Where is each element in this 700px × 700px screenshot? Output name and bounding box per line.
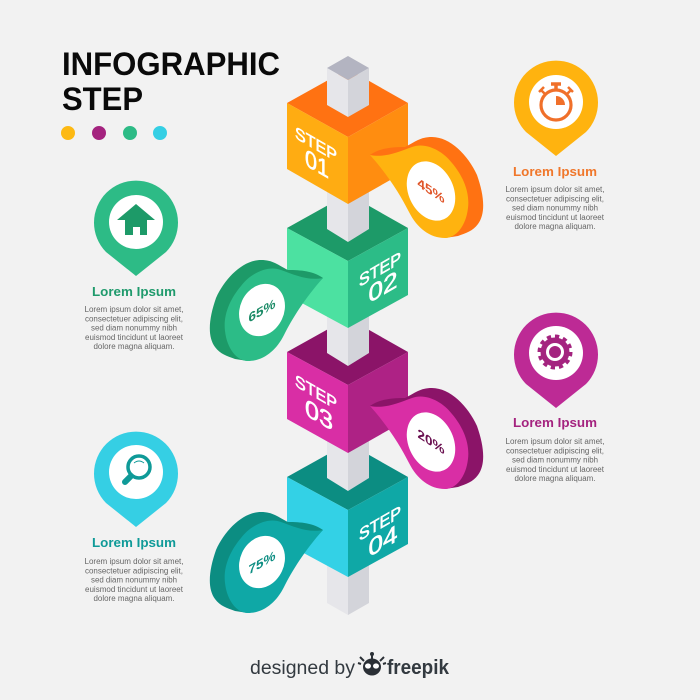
- callout: 20%: 20%: [418, 426, 445, 459]
- text block: left lower: Lorem Ipsum: [92, 535, 176, 550]
- cube: step 02: 02: [368, 266, 398, 309]
- text block: left lower: sed diam nonummy nibh: [91, 576, 177, 585]
- text block: left upper: Lorem ipsum dolor sit amet,: [84, 305, 184, 314]
- pillar: segment between steps 03 and 04: [327, 430, 369, 491]
- cube: step 01: STEP: [295, 122, 337, 166]
- title: STEP: [62, 81, 143, 117]
- cube: step 01: [287, 69, 408, 204]
- icon: magnifier: [125, 456, 150, 482]
- pillar: segment between steps 01 and 02: [327, 180, 369, 242]
- pin: stopwatch: [514, 61, 598, 156]
- pin: gear: [514, 313, 598, 408]
- text block: left upper: [84, 284, 184, 351]
- callout: 75%: [210, 512, 323, 613]
- cube: step 04: 04: [368, 520, 398, 563]
- text block: left upper: consectetuer adipiscing elit,: [85, 314, 183, 323]
- cube: step 03: [287, 318, 408, 453]
- text block: left upper: dolore magna aliquam.: [94, 342, 174, 351]
- text block: right lower: consectetuer adipiscing elit,: [506, 446, 604, 455]
- icon: freepik mascot: [358, 652, 386, 676]
- callout: 20%: [370, 388, 483, 489]
- icon: house: [117, 204, 155, 235]
- text block: left lower: dolore magna aliquam.: [94, 594, 174, 603]
- callout: 65%: 65%: [248, 295, 276, 326]
- text block: right lower: Lorem Ipsum: [513, 415, 597, 430]
- cube: step 02: STEP: [359, 247, 401, 291]
- text block: top right: Lorem Ipsum: [513, 164, 597, 179]
- callout: 65%: [210, 260, 323, 361]
- footer credit: [250, 652, 450, 679]
- pillar: top segment: [327, 56, 369, 117]
- footer credit: freepik: [387, 657, 450, 679]
- text block: top right: sed diam nonummy nibh: [512, 204, 598, 213]
- text block: left lower: consectetuer adipiscing elit,: [85, 566, 183, 575]
- text block: left upper: euismod tincidunt ut laoreet: [85, 333, 184, 342]
- text block: left upper: sed diam nonummy nibh: [91, 324, 177, 333]
- pillar: segment between steps 02 and 03: [327, 305, 369, 366]
- text block: right lower: sed diam nonummy nibh: [512, 456, 598, 465]
- cube: step 04: [287, 443, 408, 577]
- title: [62, 46, 280, 117]
- text block: right lower: Lorem ipsum dolor sit amet,: [506, 437, 604, 446]
- text block: right lower: euismod tincidunt ut laoreet: [506, 465, 605, 474]
- colour dots: [61, 126, 167, 140]
- text block: left lower: euismod tincidunt ut laoreet: [85, 585, 184, 594]
- icon: gear: [540, 336, 570, 368]
- icon: stopwatch: [539, 84, 573, 120]
- text block: left upper: Lorem Ipsum: [92, 284, 176, 299]
- text block: left lower: Lorem ipsum dolor sit amet,: [84, 557, 184, 566]
- pillar: bottom segment: [327, 560, 369, 615]
- cube: step 03: STEP: [295, 370, 337, 414]
- callout: 75%: 75%: [248, 547, 276, 578]
- text block: top right: dolore magna aliquam.: [514, 222, 596, 231]
- text block: top right: consectetuer adipiscing elit,: [506, 194, 604, 203]
- text block: top right: Lorem ipsum dolor sit amet,: [506, 185, 604, 194]
- footer credit: designed by: [250, 658, 356, 679]
- cube: step 03: 03: [305, 395, 333, 437]
- text block: top right: [506, 164, 605, 231]
- text block: right lower: dolore magna aliquam.: [514, 474, 596, 483]
- cube: step 01: 01: [305, 145, 329, 184]
- cube: step 04: STEP: [359, 501, 401, 545]
- text block: right lower: [506, 415, 605, 483]
- title: INFOGRAPHIC: [62, 46, 280, 82]
- pin: house: [94, 181, 178, 276]
- callout: 45%: [370, 137, 483, 238]
- pin: magnifier: [94, 432, 178, 527]
- cube: step 02: [287, 194, 408, 328]
- callout: 45%: 45%: [418, 175, 445, 208]
- text block: left lower: [84, 535, 184, 603]
- text block: top right: euismod tincidunt ut laoreet: [506, 213, 605, 222]
